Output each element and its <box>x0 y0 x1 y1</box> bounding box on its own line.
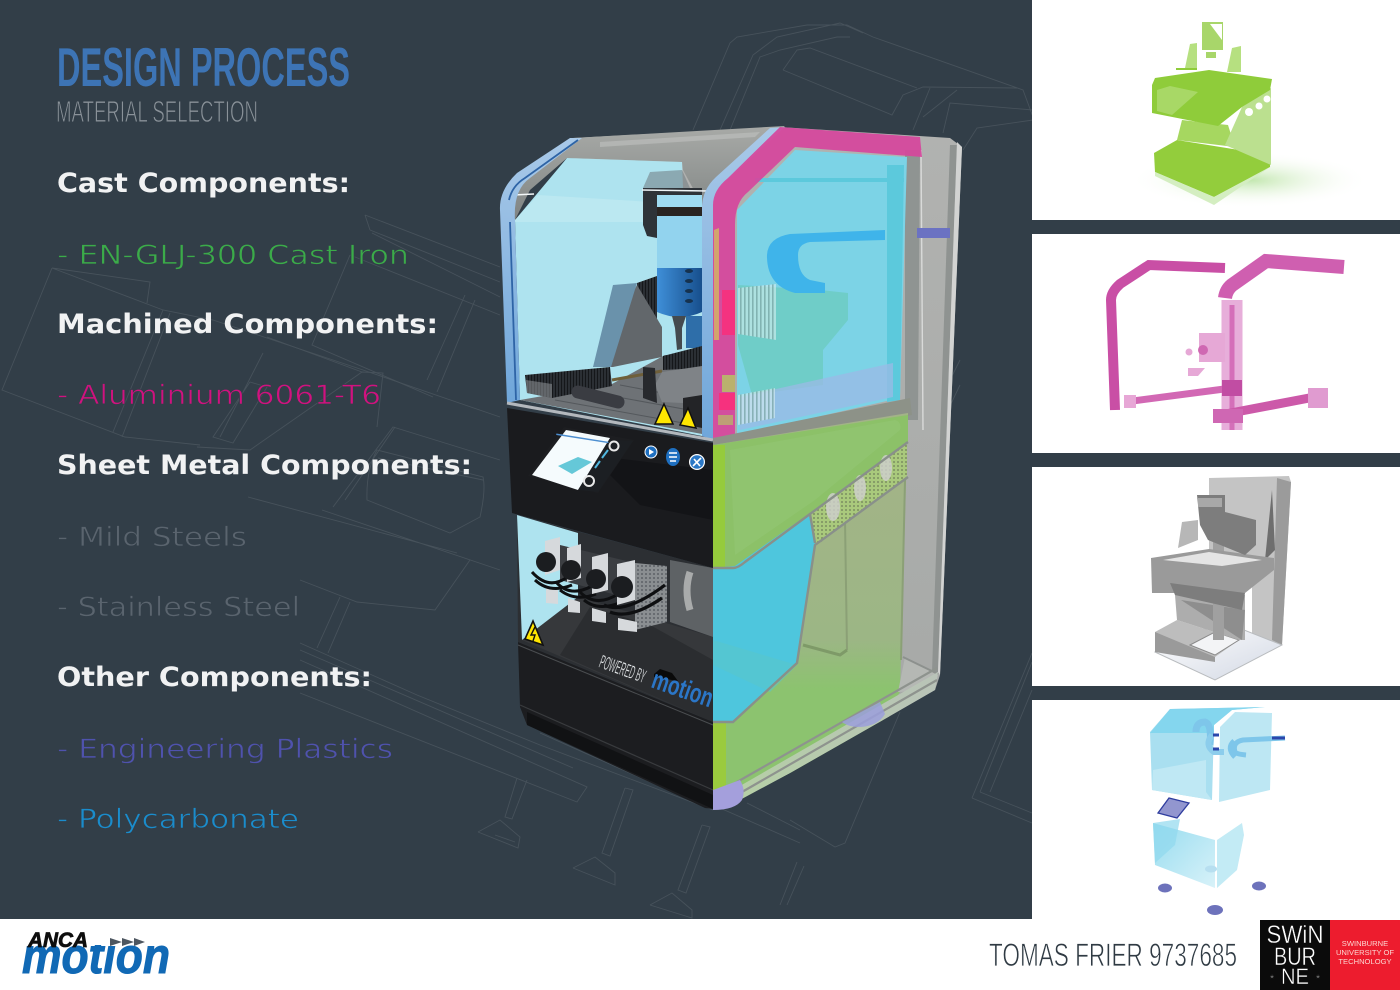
logo: Swinburne: SWINBURNE <box>1342 939 1388 948</box>
subtitle: MATERIAL SELECTION <box>56 94 258 129</box>
lower post face <box>898 657 938 692</box>
left blue aluminium frame <box>500 138 582 403</box>
heading: cast components: Cast Components: <box>57 168 350 199</box>
blue cable chain <box>767 230 885 293</box>
bar stock <box>578 392 618 402</box>
logo: Swinburne: * <box>1270 973 1275 985</box>
heading: machined components: Machined Components: <box>57 309 438 340</box>
right panel: other parts <box>1032 700 1400 919</box>
logo: Swinburne: TECHNOLOGY <box>1338 957 1392 966</box>
vent fan <box>880 455 892 481</box>
logo: Swinburne: BUR <box>1274 943 1316 971</box>
upper box <box>1151 549 1274 593</box>
icon: play button <box>644 446 658 458</box>
footer band <box>0 919 1400 990</box>
logo: Swinburne: * <box>1316 973 1321 985</box>
bracket <box>1186 333 1225 376</box>
logo: Swinburne: UNIVERSITY OF <box>1336 948 1394 957</box>
touchscreen <box>528 427 634 493</box>
item: polycarbonate: - Polycarbonate <box>57 804 299 835</box>
ribbed linear rail <box>525 367 612 398</box>
lower box <box>1155 620 1239 657</box>
warning sign <box>655 404 673 424</box>
black control panel <box>507 408 713 568</box>
main machine render <box>500 126 962 810</box>
control cabinet <box>670 560 713 637</box>
vent fan <box>826 493 840 521</box>
spindle housing <box>643 170 690 188</box>
cast body <box>1152 22 1272 205</box>
right panel: cast parts <box>1032 0 1400 220</box>
right cyan polycarbonate window <box>737 150 907 435</box>
item: mild steels: - Mild Steels <box>57 522 247 553</box>
motion mini logo <box>648 664 717 713</box>
column and rear panel <box>1175 595 1245 640</box>
heading: sheet metal components: Sheet Metal Components: <box>57 450 472 481</box>
servo drive <box>532 537 572 604</box>
lower electronics bay <box>517 515 713 722</box>
item: cast iron: - EN-GLJ-300 Cast Iron <box>57 240 409 271</box>
base plate <box>1155 628 1282 680</box>
heading: other components: Other Components: <box>57 662 372 693</box>
lower polycarbonate right <box>1217 823 1244 888</box>
plastic feet <box>1158 866 1266 915</box>
servo drive <box>556 544 596 613</box>
ground shadow <box>1130 152 1370 208</box>
internal mechanics seen through glass <box>738 284 893 430</box>
logo: Swinburne: NE <box>1281 964 1309 989</box>
material list <box>57 168 472 835</box>
right panel: sheet metal parts <box>1032 467 1400 686</box>
cyan lower polycarbonate <box>713 513 815 722</box>
title: DESIGN PROCESS <box>57 36 350 98</box>
sheet metal right lower side in green <box>713 413 938 808</box>
motion mini logo: motion <box>648 664 717 713</box>
fan mesh vent <box>810 443 907 546</box>
lower polycarbonate left <box>1153 823 1215 888</box>
icon: layers <box>666 448 680 466</box>
servo drive <box>604 560 665 632</box>
item: engineering plastics: - Engineering Plastics <box>57 734 393 765</box>
centre light-blue frame <box>702 127 785 440</box>
warning sign: electrical <box>525 621 543 645</box>
connector blocks <box>1124 380 1328 423</box>
tablet screen part <box>1158 798 1189 818</box>
item: stainless steel: - Stainless Steel <box>57 592 300 623</box>
top-left polycarbonate cover <box>1150 707 1265 800</box>
faint technical line drawing background <box>2 23 1033 918</box>
logo: Swinburne: SWiN <box>1266 921 1324 949</box>
left aluminium profile <box>1111 265 1225 410</box>
sheet outline edges <box>713 442 908 722</box>
machine table floor <box>520 355 702 434</box>
back wall <box>1209 476 1291 645</box>
black lower plinth <box>518 642 713 809</box>
gantry column <box>637 276 657 327</box>
author credit: TOMAS FRIER 9737685 <box>989 937 1237 973</box>
translucent base strip <box>725 672 938 808</box>
machined magenta frame overlay <box>713 127 922 438</box>
logo: Swinburne <box>1260 920 1400 990</box>
left polycarbonate window <box>515 158 702 436</box>
right aluminium profile <box>1225 261 1344 430</box>
machine interior <box>513 170 708 434</box>
cable chains <box>1196 722 1285 756</box>
front foot <box>713 780 744 810</box>
right foot <box>842 702 885 727</box>
logo: ANCA Motion: ANCA <box>27 929 88 952</box>
logo: ANCA Motion <box>22 932 169 974</box>
perforated drive bodies <box>635 563 667 630</box>
spindle <box>657 195 702 207</box>
top-right polycarbonate cover <box>1219 712 1272 802</box>
glass and frame base rail <box>507 403 713 440</box>
cable on grey post <box>917 228 950 238</box>
logo: ANCA Motion: motion <box>22 928 170 984</box>
servo drive <box>580 553 622 623</box>
spindle assembly <box>1197 495 1256 555</box>
warning sign <box>680 408 696 428</box>
adjustable feet <box>713 702 885 810</box>
main machine render: POWERED BY <box>596 652 649 688</box>
icon: tools <box>689 454 705 470</box>
grey outer shell: right post and roof <box>565 127 962 809</box>
right panel: machined parts <box>1032 234 1400 453</box>
item: aluminium: - Aluminium 6061-T6 <box>57 380 381 411</box>
vent fan <box>854 475 866 501</box>
vise block <box>655 366 702 404</box>
cross rails <box>1125 388 1325 416</box>
